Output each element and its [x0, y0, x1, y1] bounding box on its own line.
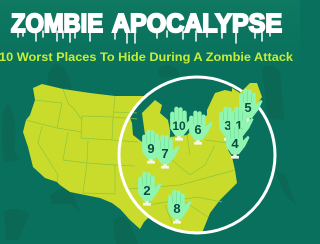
hand marker 3: 3	[224, 118, 232, 133]
hand marker 5	[239, 91, 263, 123]
hand marker 8: 8	[173, 201, 181, 216]
hand marker 7	[156, 137, 180, 169]
hand marker 5: 5	[244, 100, 252, 115]
hand marker 3	[219, 109, 243, 141]
hand marker 10: 10	[172, 119, 186, 133]
hand marker 1	[230, 109, 254, 141]
hand marker 2	[138, 174, 162, 206]
hand marker 7: 7	[161, 146, 169, 161]
hand marker 2: 2	[143, 183, 151, 198]
title: APOCALYPSE	[112, 8, 282, 38]
hand marker 4: 4	[231, 136, 239, 151]
circle highlight ring	[119, 77, 275, 233]
hand marker 6: 6	[194, 122, 202, 137]
state borders	[26, 89, 237, 223]
map of the United States	[23, 77, 275, 233]
hand marker 9	[142, 132, 166, 164]
hand marker 4	[226, 127, 250, 159]
subtitle: 10 Worst Places To Hide During A Zombie Attack	[0, 50, 293, 64]
title	[11, 8, 282, 43]
Maine and New England	[232, 83, 262, 125]
map landmass	[23, 84, 250, 233]
hand marker 1: 1	[235, 118, 243, 133]
hand marker 10	[170, 109, 194, 141]
hand marker 9: 9	[147, 141, 155, 156]
zombie silhouettes	[2, 64, 296, 244]
hand marker 8	[168, 192, 192, 224]
title: ZOMBIE	[11, 8, 103, 38]
hand marker 6	[189, 113, 213, 145]
